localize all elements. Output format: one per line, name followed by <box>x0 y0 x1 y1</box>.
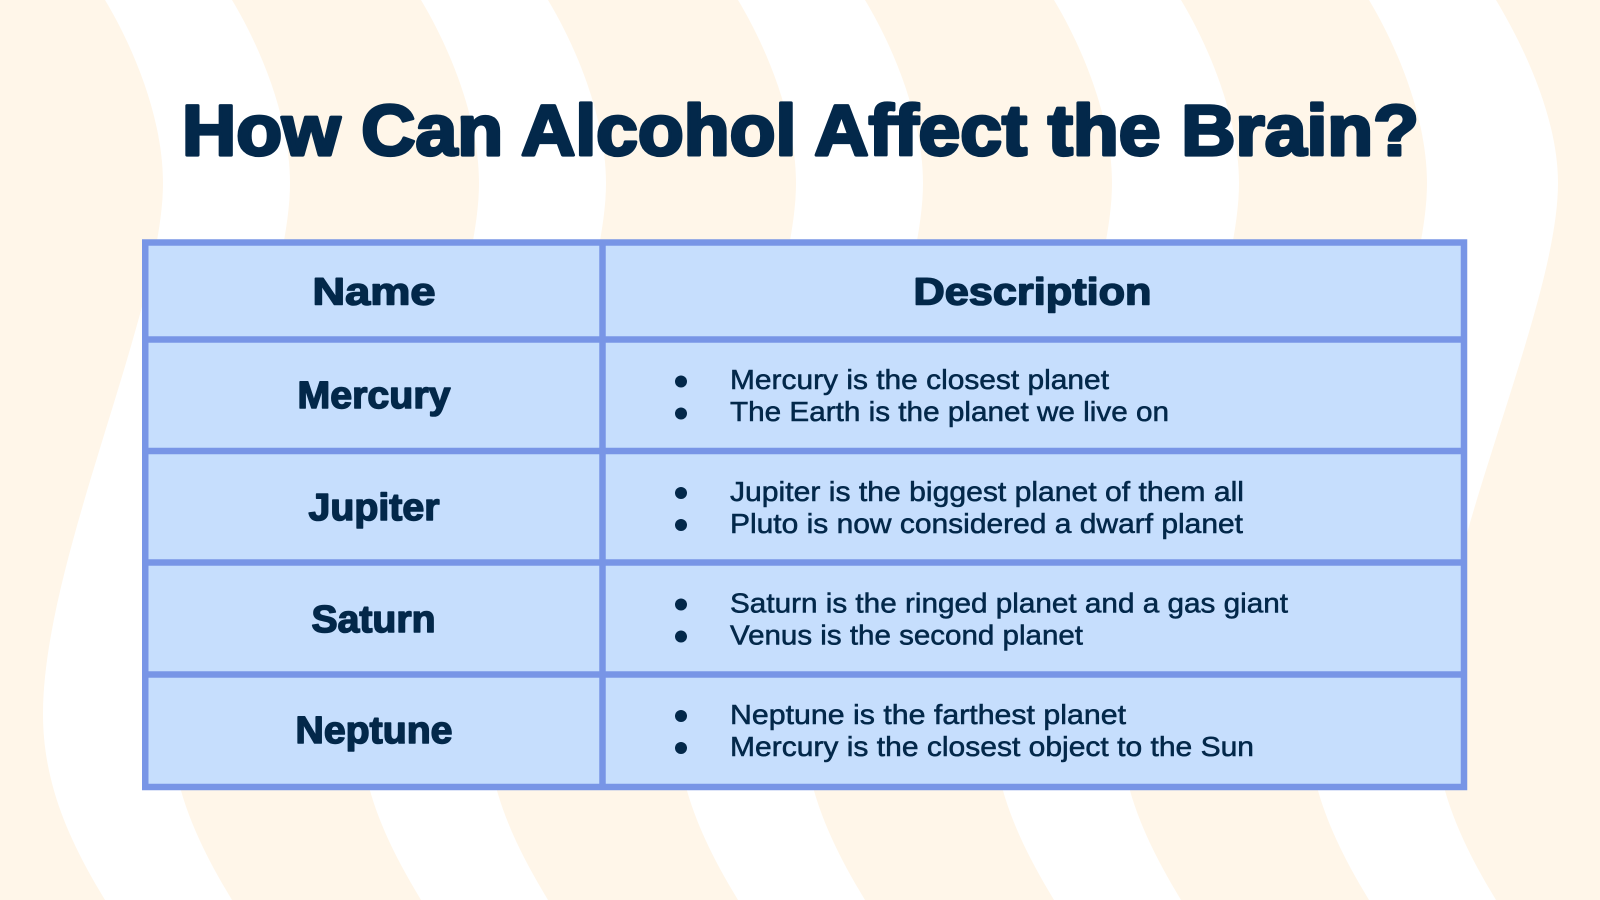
row: Mercury <box>298 364 1169 427</box>
header: Name: Name <box>312 272 436 314</box>
row: Saturn: Venus is the second planet <box>730 620 1083 650</box>
row: Neptune <box>296 699 1254 762</box>
row: Mercury: Mercury <box>298 375 450 417</box>
row: Neptune: Neptune is the farthest planet <box>730 699 1126 730</box>
row: Jupiter: Jupiter is the biggest planet of them all <box>730 476 1244 507</box>
row: Jupiter: Jupiter <box>308 487 440 529</box>
row: Jupiter <box>308 476 1244 539</box>
row: Neptune: Mercury is the closest object to the Sun <box>730 731 1254 762</box>
row: Saturn: Saturn is the ringed planet and a gas giant <box>730 588 1288 618</box>
title: How Can Alcohol Affect the Brain? <box>182 92 1419 171</box>
table background and grid <box>145 242 1464 787</box>
row: Neptune: Neptune <box>296 710 452 752</box>
table <box>145 242 1464 787</box>
row: Mercury: The Earth is the planet we live on <box>730 396 1169 427</box>
row: Saturn: Saturn <box>312 599 436 641</box>
header: Description: Description <box>914 272 1152 314</box>
row: Jupiter: Pluto is now considered a dwarf planet <box>730 508 1243 539</box>
row: Mercury: Mercury is the closest planet <box>730 364 1109 395</box>
row: Saturn <box>312 588 1288 650</box>
